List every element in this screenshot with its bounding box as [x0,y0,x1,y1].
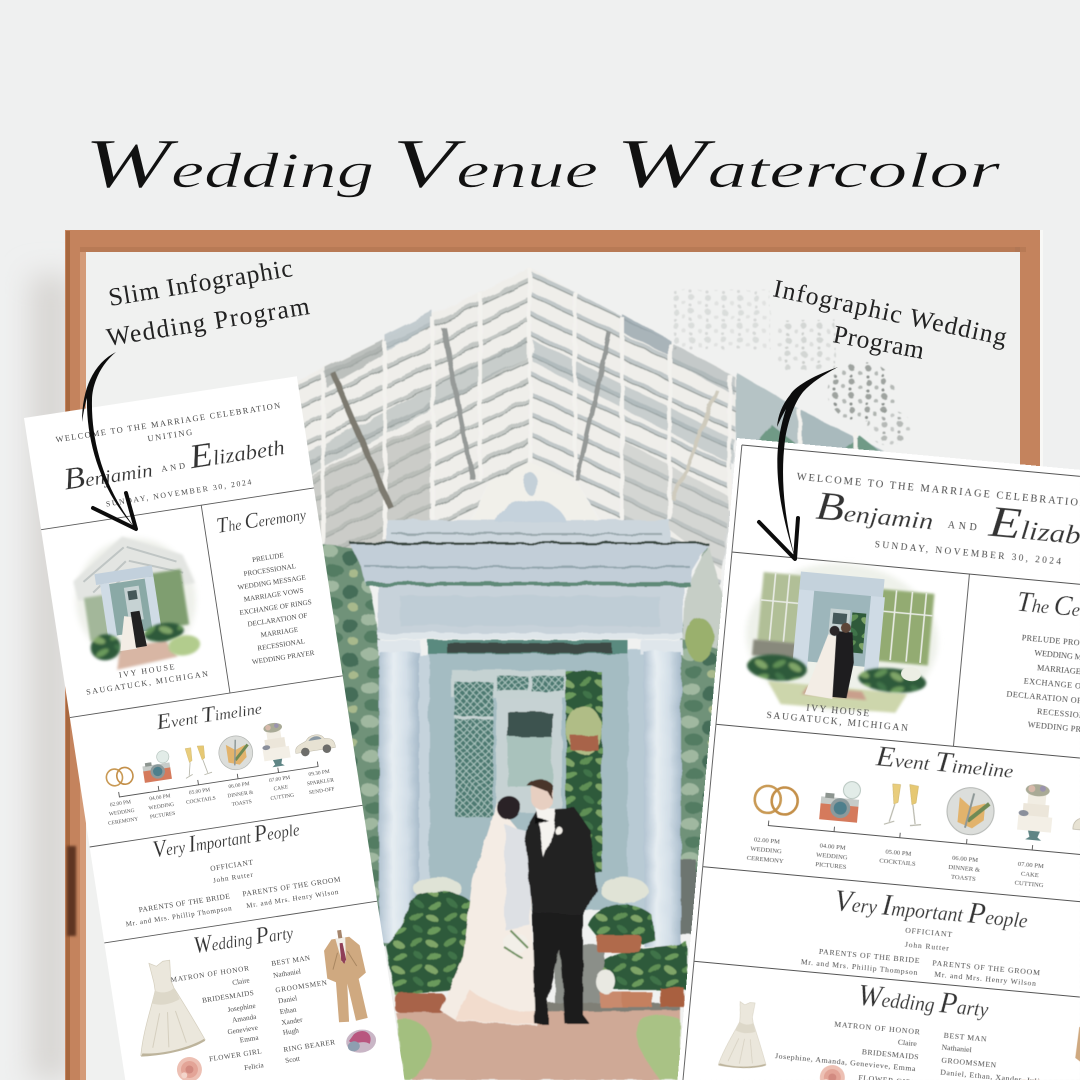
important people names: PARENTS OF THE GROOM [242,874,341,898]
slim program sheet [24,376,405,1080]
timeline labels: WEDDING [109,808,135,818]
header text: Elizabeth [186,425,287,476]
header text: Benjamin [814,483,936,538]
groom side names: Hugh [282,1026,300,1037]
important people names [800,916,1043,988]
bride side names: BRIDESMAIDS [861,1047,919,1061]
venue watercolor thumbnail [740,555,944,720]
stone wall right [681,860,696,935]
roof mullions [323,268,855,560]
callout: infographic program label: Program [831,319,927,365]
frieze [378,586,683,639]
important people names: Mr. and Mrs. Phillip Thompson [800,957,918,977]
ceremony order list: WEDDING PRAYER [251,649,315,666]
groom side names [939,1031,1052,1080]
timeline labels: CEREMONY [108,816,139,827]
timeline labels: 06.00 PM [228,781,250,790]
ceremony order list: MARRIAGE VOWS [243,587,304,604]
venue caption: IVY HOUSE [118,662,175,680]
header text: SUNDAY, NOVEMBER 30, 2024 [105,477,252,509]
greenhouse roof [296,268,885,590]
timeline labels: CAKE [1021,871,1039,879]
venue caption: SAUGATUCK, MICHIGAN [86,669,209,697]
ceremony order list: EXCHANGE OF RINGS [239,598,312,617]
ceremony order list: MARRIAGE [260,626,299,639]
timeline labels: 02.00 PM [754,836,780,846]
wedding party heading: Wedding Party [857,977,991,1024]
garden path [396,1010,680,1080]
portico cornice [350,542,708,586]
header text [55,401,291,515]
light opening above pediment [470,462,600,522]
steps [540,945,680,1015]
bride side names: Claire [897,1037,918,1048]
foliage right of door [566,672,602,872]
important people names: PARENTS OF THE GROOM [932,958,1040,977]
callout: slim program label [104,253,312,352]
icon: wedding dress [127,957,206,1058]
header text: AND [161,460,186,474]
venue caption: SAUGATUCK, MICHIGAN [766,711,908,734]
timeline labels: CAKE [273,784,289,792]
icon: rose [819,1064,846,1080]
right column [641,640,683,947]
venue watercolor thumbnail [67,527,206,674]
timeline labels: 04.00 PM [819,842,846,852]
panel: slim infographic wedding program [24,376,405,1080]
ceremony order list: PRELUDE [252,551,284,564]
ceremony order list: PROCESSIONAL [243,562,297,578]
timeline labels: COCKTAILS [879,857,916,868]
header text [791,472,1080,573]
full program sheet [677,438,1080,1080]
important people names: OFFICIANT [905,926,953,939]
bride side names: Amanda [232,1013,258,1024]
timeline icons [102,714,337,792]
wedding party heading: Wedding Party [192,918,295,959]
groom side names: Daniel [278,994,298,1005]
section dividers [41,488,377,943]
timeline labels: 05.00 PM [189,787,211,796]
timeline labels: CUTTING [1014,880,1044,889]
icon: rose [175,1055,204,1080]
header text: SUNDAY, NOVEMBER 30, 2024 [874,540,1062,567]
lattice windows [452,670,566,817]
watercolor venue painting [296,268,912,1080]
title: V enue [392,126,598,203]
garden right [678,545,724,935]
timeline labels: DINNER & [948,864,981,874]
callout: infographic program label: Infographic Wedding [771,274,1010,351]
bride side names [773,1014,922,1080]
ceremony order list [1003,632,1080,738]
icon: ring pillow [345,1028,378,1055]
groom side names: Nathaniel [273,968,301,980]
timeline labels: PICTURES [815,861,847,871]
groom side names [270,952,339,1065]
left planter group [385,877,473,1013]
timeline labels [105,768,336,827]
timeline axis [119,762,318,797]
roof trusses [333,373,390,507]
icon: wedding dress [718,1000,772,1071]
very important people heading: Very Important People [151,815,302,863]
icon: groom suit [320,927,373,1024]
venue caption [84,657,209,697]
event timeline heading: Event Timeline [154,694,264,734]
wall shadow left of frame [30,275,72,1080]
title: W atercolor [615,126,1001,203]
groom side names: Nathaniel [941,1043,973,1054]
timeline labels: 04.00 PM [149,793,171,802]
couple: groom [525,779,597,1024]
garden left [320,545,388,945]
important people names: John Rutter [905,940,950,953]
timeline labels: 07.00 PM [1017,861,1044,870]
header text: WELCOME TO THE MARRIAGE CELEBRATION [55,401,281,444]
title [84,126,1001,203]
important people names: OFFICIANT [210,857,254,873]
bride side names: Claire [232,976,250,987]
pediment [387,473,670,544]
timeline labels: TOASTS [951,874,976,883]
door [496,698,562,813]
timeline labels: DINNER & [227,790,255,800]
timeline labels: 07.00 PM [269,775,291,784]
arrow: to full program venue [759,367,838,559]
groom side names: Scott [285,1055,300,1065]
timeline labels: SPARKLER [307,777,335,787]
timeline labels [746,836,1046,889]
groom side names: BEST MAN [271,954,311,968]
event timeline heading: Event Timeline [874,741,1015,785]
timeline labels: PICTURES [150,811,176,820]
timeline labels: TOASTS [231,799,252,808]
bride side names: Felicia [244,1061,265,1072]
bride side names: BRIDESMAIDS [202,989,254,1005]
important people names: Mr. and Mrs. Henry Wilson [934,970,1037,988]
timeline labels: CUTTING [270,793,295,802]
header text: WELCOME TO THE MARRIAGE CELEBRATION [796,472,1080,510]
header text: Benjamin [61,448,154,496]
bride side names: Genevieve [227,1024,259,1036]
timeline labels: 06.00 PM [952,855,978,864]
bride side names: Emma [239,1034,260,1044]
venue caption: IVY HOUSE [806,704,870,719]
important people names: Mr. and Mrs. Phillip Thompson [125,904,233,928]
bride side names: FLOWER GIRL [209,1047,262,1063]
ceremony order list: DECLARATION OF [247,611,308,629]
timeline labels: WEDDING [148,802,175,812]
bride side names: Josephine [227,1002,256,1014]
bride side names: Josephine, Amanda, Genevieve, Emma [775,1051,916,1073]
timeline labels: COCKTAILS [186,795,216,806]
left column [378,640,420,942]
groom side names: RING BEARER [283,1038,336,1054]
right planter group [588,877,687,1007]
timeline labels: WEDDING [750,846,782,855]
portico wall and door recess [416,640,646,930]
callout: slim program label: Wedding Program [104,291,312,352]
callout: slim program label: Slim Infographic [106,253,295,312]
ceremony heading: The Ceremony [215,500,308,538]
timeline labels: 09.30 PM [308,769,330,778]
picture frame [65,230,1043,1080]
title: W edding [84,126,374,203]
groom side names: GROOMSMEN [941,1056,997,1070]
ceremony order list: RECESSIONAL [257,637,306,652]
very important people heading: Very Important People [833,882,1030,935]
icon: groom suit [1071,1008,1080,1080]
timeline labels: 05.00 PM [885,848,912,858]
couple: bride [440,796,541,1026]
timeline labels: SEND-OFF [309,786,335,796]
important people names: PARENTS OF THE BRIDE [819,947,920,965]
timeline axis [768,821,1080,854]
timeline labels: 02.00 PM [110,799,132,808]
tree smudge upper right [670,290,912,446]
important people names: John Rutter [213,871,254,885]
important people names [119,845,343,928]
header text: AND [947,520,977,534]
header text: UNITING [147,428,193,443]
bride side names: MATRON OF HONOR [170,964,250,984]
bushes along path [397,1015,680,1080]
section dividers [683,445,1080,1080]
important people names: Mr. and Mrs. Henry Wilson [246,888,339,910]
bride side names [170,964,265,1080]
important people names: PARENTS OF THE BRIDE [138,891,231,914]
timeline icons [753,758,1080,850]
bride side names: MATRON OF HONOR [834,1020,921,1036]
ceremony order list [231,548,320,667]
groom side names: GROOMSMEN [275,979,328,995]
timeline labels: WEDDING [816,852,848,862]
arrow: to slim program venue [82,352,136,529]
groom side names: Xander [281,1016,304,1027]
timeline labels: CEREMONY [746,855,784,865]
venue caption [766,700,909,734]
groom side names: Ethan [279,1006,297,1016]
panel: full infographic wedding program [677,438,1080,1080]
groom side names: BEST MAN [943,1031,987,1044]
ceremony order list: WEDDING MESSAGE [237,573,306,592]
